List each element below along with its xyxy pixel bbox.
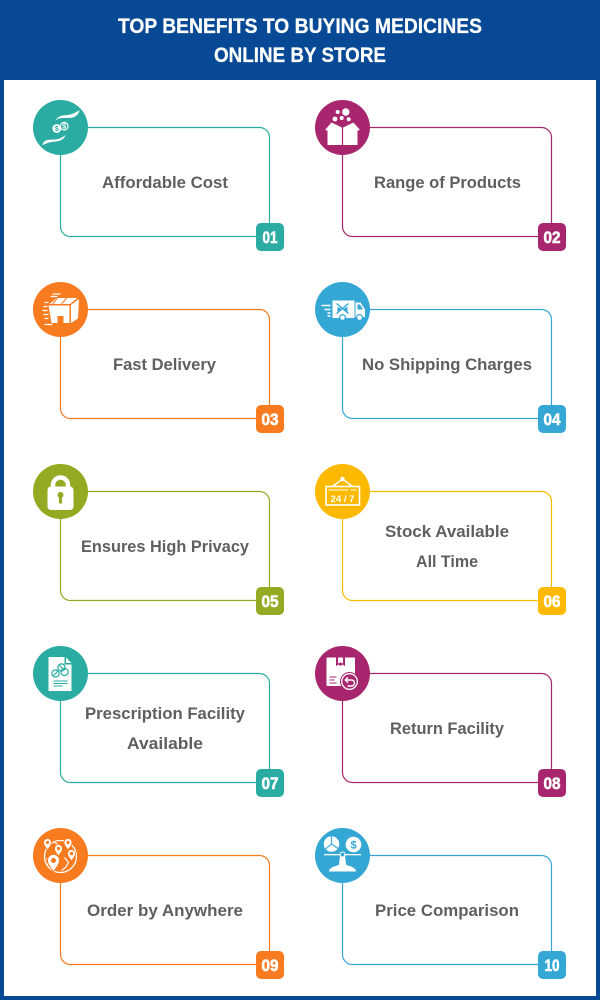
number badge xyxy=(538,587,566,615)
icon: prescription document xyxy=(33,646,88,701)
icon: hands exchanging coins xyxy=(33,100,88,155)
number badge xyxy=(538,769,566,797)
label: No Shipping Charges xyxy=(362,355,532,374)
number badge xyxy=(256,405,284,433)
panel: no shipping charges xyxy=(315,282,566,433)
number badge xyxy=(538,405,566,433)
title xyxy=(118,15,482,67)
label xyxy=(385,522,509,571)
number badge xyxy=(256,769,284,797)
number badge: 04 xyxy=(544,411,561,429)
number badge: 06 xyxy=(544,593,560,611)
panel: return facility xyxy=(315,646,566,797)
number badge xyxy=(256,951,284,979)
icon: hands exchanging coins: $ xyxy=(55,126,59,133)
icon: speeding package xyxy=(33,282,88,337)
icon: open box xyxy=(315,100,370,155)
number badge: 10 xyxy=(544,957,560,975)
label: Affordable Cost xyxy=(102,173,228,192)
icon: 24/7 hanging sign xyxy=(315,464,370,519)
icon: delivery truck xyxy=(315,282,370,337)
number badge: 01 xyxy=(262,229,278,247)
icon: globe with map pins xyxy=(33,828,88,883)
number badge xyxy=(256,587,284,615)
panel: prescription facility xyxy=(33,646,284,797)
label: Prescription Facility xyxy=(85,704,246,723)
panel: price comparison xyxy=(315,828,566,979)
label: Range of Products xyxy=(374,173,521,192)
number badge xyxy=(538,951,566,979)
number badge xyxy=(256,223,284,251)
number badge: 05 xyxy=(262,593,278,611)
panel: order by anywhere xyxy=(33,828,284,979)
label: All Time xyxy=(416,552,478,571)
title: TOP BENEFITS TO BUYING MEDICINES xyxy=(118,15,482,38)
label: Return Facility xyxy=(390,719,505,738)
icon: hands exchanging coins: $ xyxy=(62,124,66,131)
panel: affordable cost xyxy=(33,100,284,251)
label: Order by Anywhere xyxy=(87,901,243,920)
panel: range of products xyxy=(315,100,566,251)
label: Available xyxy=(127,734,203,753)
icon: balance scale xyxy=(315,828,370,883)
panel: ensures high privacy xyxy=(33,464,284,615)
label xyxy=(85,704,246,753)
icon: return parcel xyxy=(315,646,370,701)
title: ONLINE BY STORE xyxy=(214,44,386,67)
label: Ensures High Privacy xyxy=(81,537,250,556)
label: Fast Delivery xyxy=(113,355,217,374)
number badge: 08 xyxy=(544,775,560,793)
panel: fast delivery xyxy=(33,282,284,433)
icon: balance scale: $ xyxy=(350,840,357,852)
panel: stock available all time xyxy=(315,464,566,615)
label: Stock Available xyxy=(385,522,509,541)
number badge: 07 xyxy=(262,775,278,793)
icon: 24/7 hanging sign: 24 / 7 xyxy=(330,494,354,505)
number badge: 09 xyxy=(262,957,278,975)
number badge: 03 xyxy=(262,411,278,429)
number badge: 02 xyxy=(544,229,560,247)
label: Price Comparison xyxy=(375,901,519,920)
icon: padlock xyxy=(33,464,88,519)
number badge xyxy=(538,223,566,251)
